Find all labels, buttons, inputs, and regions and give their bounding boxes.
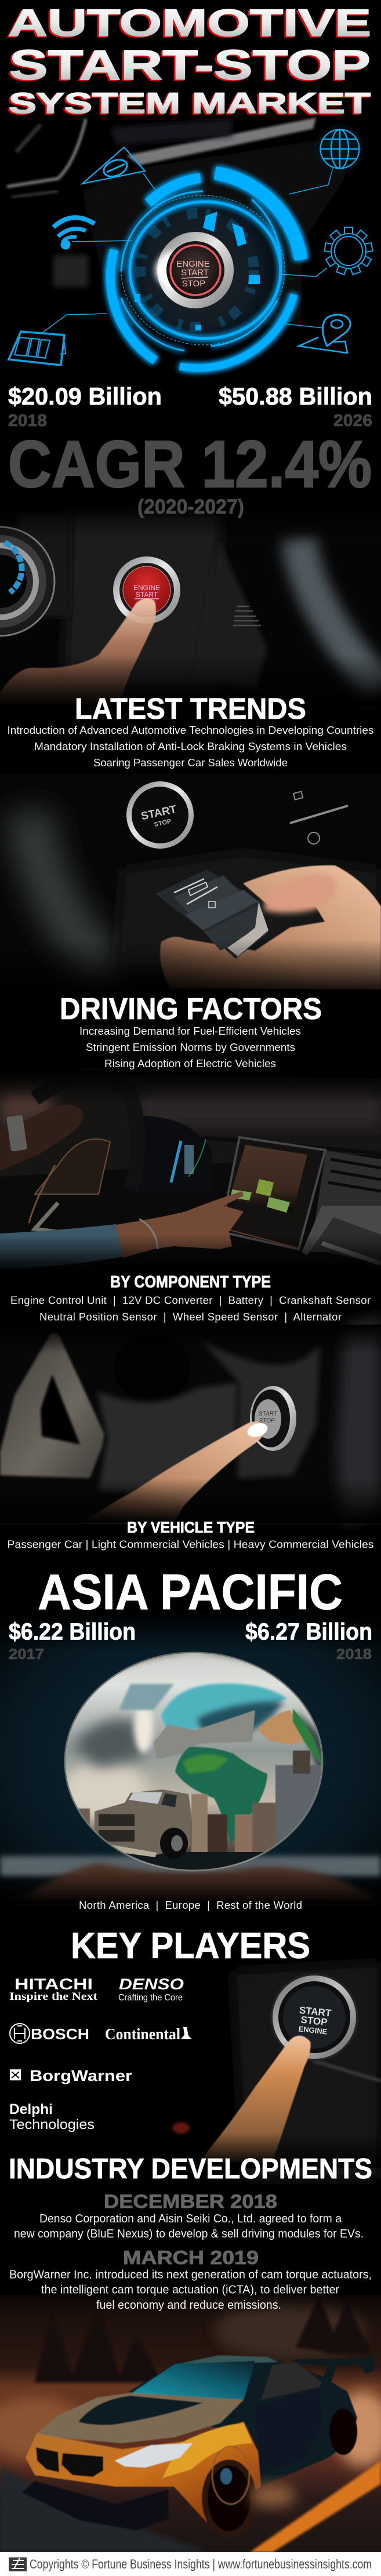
orange dust left bbox=[0, 2397, 87, 2461]
fade cockpit image top bbox=[0, 1069, 381, 1104]
africa green bbox=[293, 1709, 322, 1765]
icon: triangle warning bbox=[82, 147, 145, 184]
panel: company logos bbox=[9, 1975, 192, 2133]
red indicator light bbox=[172, 2122, 190, 2134]
hand holding key bbox=[160, 865, 381, 989]
fade key image bottom bbox=[0, 939, 381, 997]
trend 1: Introduction of Advanced Automotive Technologies in Developing Countries bbox=[7, 724, 373, 736]
panel: latest trends bbox=[7, 692, 373, 769]
factor 2: Stringent Emission Norms by Governments bbox=[86, 1041, 295, 1053]
development 2: BorgWarner Inc. introduced its next generation of cam torque actuators, bbox=[9, 2269, 372, 2282]
south america highlight bbox=[183, 1754, 229, 1774]
vent bbox=[233, 606, 261, 625]
panel: driving factors bbox=[60, 992, 322, 1069]
start stop engine button bbox=[270, 1973, 358, 2061]
dark column bbox=[114, 1332, 190, 1404]
grille right bbox=[61, 2453, 103, 2477]
panel: key fob image bbox=[0, 774, 381, 997]
start button: STOP bbox=[182, 279, 205, 289]
fade finger image top bbox=[0, 1325, 381, 1354]
dashboard leather panel bbox=[64, 510, 220, 690]
glass globe bbox=[61, 1652, 325, 1875]
orange nose bbox=[26, 2422, 261, 2522]
road stripe bbox=[250, 2461, 381, 2552]
heading: key players: KEY PLAYERS bbox=[71, 1926, 310, 1966]
distant hill glow bbox=[215, 2301, 365, 2359]
forecast period: (2020-2027) bbox=[137, 496, 244, 518]
instrument cluster bbox=[125, 1116, 212, 1194]
panel: cockpit image bbox=[0, 1072, 381, 1271]
development 2: the intelligent cam torque actuation (iCTA), to deliver better bbox=[41, 2284, 339, 2297]
panel: march 2019 development bbox=[9, 2247, 372, 2312]
thumb highlight bbox=[264, 874, 336, 913]
logo: Hitachi: Inspire the Next bbox=[9, 1991, 98, 2003]
logo: Delphi: Technologies bbox=[9, 2117, 95, 2133]
panel: footer bbox=[0, 2552, 381, 2576]
date march 2019: MARCH 2019 bbox=[123, 2247, 259, 2268]
wrist bracelet bbox=[139, 1219, 158, 1249]
title bbox=[8, 1, 371, 119]
yellow highlight bbox=[162, 2423, 252, 2478]
dark sea bbox=[197, 1701, 284, 1733]
start stop engine button: STOP bbox=[300, 2014, 328, 2028]
fade bottom bbox=[0, 1872, 381, 1904]
headlight bbox=[115, 2443, 193, 2468]
dashboard panel bbox=[116, 852, 381, 985]
car body bbox=[22, 2355, 357, 2534]
year 2018: 2018 bbox=[8, 412, 47, 430]
panel: button image behind key players bbox=[172, 1962, 381, 2180]
fade over button image top bbox=[0, 499, 381, 539]
panel icons bbox=[290, 791, 348, 844]
hand touching screen bbox=[116, 1191, 244, 1258]
icon: wifi bbox=[53, 217, 95, 249]
panel: by component type bbox=[10, 1273, 371, 1323]
icon: gear bbox=[324, 227, 373, 275]
forest silhouettes bbox=[35, 2295, 371, 2382]
logo: Bosch: BOSCH bbox=[31, 2025, 89, 2043]
key fob bbox=[155, 869, 268, 959]
title line 2: START-STOP bbox=[9, 42, 371, 89]
trend 2: Mandatory Installation of Anti-Lock Braking Systems in Vehicles bbox=[34, 740, 347, 752]
left panel bbox=[17, 513, 70, 617]
finger pressing button bbox=[0, 599, 156, 704]
logo: BorgWarner: BorgWarner bbox=[30, 2067, 133, 2084]
bottom fade bbox=[174, 2133, 381, 2168]
start stop engine button: START bbox=[299, 2004, 332, 2019]
leather panel right bbox=[200, 1339, 320, 1478]
red engine start button: START bbox=[136, 591, 158, 599]
dashboard backdrop bbox=[0, 1072, 381, 1269]
steering wheel bbox=[29, 1076, 138, 1235]
fade top bbox=[0, 1611, 381, 1652]
start stop button bbox=[126, 781, 194, 849]
dark upper rim bbox=[115, 1653, 261, 1676]
lower intake bbox=[22, 2481, 168, 2530]
vehicle list: Passenger Car | Light Commercial Vehicles | Heavy Commercial Vehicles bbox=[7, 1538, 373, 1550]
logo: Denso bbox=[118, 1975, 184, 2003]
value 2017: $6.22 Billion bbox=[9, 1618, 136, 1645]
north america silver bbox=[154, 1710, 255, 1759]
development 2 bbox=[9, 2269, 372, 2312]
background scene bbox=[0, 2295, 381, 2552]
logo: Delphi bbox=[9, 2101, 95, 2133]
value 2018: $6.27 Billion bbox=[245, 1618, 372, 1645]
icon: battery bbox=[9, 332, 66, 365]
date december 2018: DECEMBER 2018 bbox=[104, 2191, 277, 2212]
panel: sports car image bbox=[0, 2295, 381, 2552]
wing bbox=[293, 2353, 374, 2384]
logo: Hitachi: HITACHI bbox=[14, 1975, 93, 1993]
blurred steering wheel bbox=[29, 812, 110, 974]
start stop engine button: ENGINE bbox=[298, 2024, 328, 2036]
panel: industry developments bbox=[9, 2153, 372, 2240]
title line 3: SYSTEM MARKET bbox=[9, 87, 371, 119]
dashed inner ring bbox=[121, 195, 285, 345]
spoke opening bbox=[41, 1374, 80, 1445]
pointing finger bbox=[81, 1421, 266, 1523]
hood scoop bbox=[78, 2396, 203, 2425]
mist band bbox=[0, 1856, 381, 1876]
ocean teal bbox=[161, 1683, 287, 1733]
fade finger image bottom bbox=[0, 1478, 381, 1523]
logo: Denso: Crafting the Core bbox=[118, 1993, 183, 2003]
development 2: fuel economy and reduce emissions. bbox=[96, 2299, 281, 2312]
dirt mound bbox=[0, 1864, 381, 1901]
value 2018: $20.09 Billion bbox=[8, 383, 162, 410]
start button bbox=[155, 232, 234, 308]
grille left bbox=[36, 2447, 59, 2472]
ground inside globe bbox=[125, 1852, 264, 1870]
leather panel bbox=[232, 1962, 381, 2180]
side windows bbox=[261, 2362, 322, 2400]
triangular trim bbox=[194, 540, 267, 690]
fade over button image bottom bbox=[0, 655, 381, 707]
south america bbox=[175, 1747, 267, 1844]
start stop button: STOP bbox=[259, 1418, 275, 1424]
base bbox=[0, 1327, 381, 1525]
fade car image top bbox=[0, 2266, 381, 2319]
panel: market size image backdrop bbox=[0, 510, 381, 707]
glowing blue rings bbox=[110, 173, 301, 368]
icon: Fortune Business Insights logo bbox=[9, 2557, 27, 2571]
start stop button: START bbox=[259, 1411, 278, 1417]
start button: START bbox=[181, 268, 209, 278]
component list 2: Neutral Position Sensor | Wheel Speed Sensor | Alternator bbox=[39, 1311, 342, 1323]
city skyline bbox=[78, 1750, 321, 1852]
door panel bbox=[255, 2388, 322, 2475]
by component black band bbox=[0, 1269, 381, 1327]
year 2017: 2017 bbox=[9, 1646, 44, 1662]
panel: by vehicle type bbox=[7, 1519, 373, 1550]
wheel dust bbox=[249, 2484, 296, 2507]
connector lines bbox=[42, 168, 333, 333]
start stop button: STOP bbox=[154, 818, 172, 828]
logo: Hitachi bbox=[9, 1975, 98, 2003]
steering spoke bbox=[0, 1333, 104, 1478]
dashboard backdrop bbox=[7, 118, 348, 325]
panel: finger on start button image bbox=[0, 1316, 381, 1525]
fade cockpit image bottom bbox=[0, 1235, 381, 1272]
development 1: new company (BluE Nexus) to develop & sell driving modules for EVs. bbox=[14, 2228, 364, 2240]
globe rim bbox=[65, 1653, 322, 1871]
panel: hero illustration bbox=[7, 118, 373, 368]
rear wheel bbox=[329, 2408, 357, 2455]
other regions: North America | Europe | Rest of the World bbox=[79, 1899, 302, 1911]
africa bbox=[257, 1710, 306, 1745]
roof bbox=[174, 2355, 278, 2365]
factor 1: Increasing Demand for Fuel-Efficient Vehicles bbox=[79, 1025, 301, 1037]
right door trim bbox=[336, 1316, 381, 1525]
panel: asia pacific bbox=[9, 1564, 372, 1911]
windshield bbox=[129, 2361, 255, 2400]
value 2026: $50.88 Billion bbox=[219, 383, 372, 410]
instrument knob bbox=[0, 527, 55, 636]
blurred steering wheel bbox=[299, 539, 381, 690]
logo: Denso: DENSO bbox=[119, 1975, 184, 1993]
central textured hub bbox=[128, 198, 273, 343]
trend 3: Soaring Passenger Car Sales Worldwide bbox=[93, 756, 288, 769]
start stop button bbox=[250, 1386, 296, 1451]
logo: Delphi: Delphi bbox=[9, 2101, 53, 2117]
painted nail bbox=[245, 1421, 270, 1439]
pickup truck bbox=[95, 1789, 192, 1859]
road bbox=[0, 2466, 209, 2552]
heading: BY VEHICLE TYPE bbox=[127, 1519, 255, 1536]
pointing finger bbox=[199, 2036, 311, 2162]
driver hand and watch bbox=[0, 1105, 84, 1171]
blue sleeve bbox=[0, 1224, 124, 1271]
development 1: Denso Corporation and Aisin Seiki Co., Ltd. agreed to form a bbox=[39, 2213, 342, 2225]
right rim shadow bbox=[295, 1709, 322, 1767]
logo: Bosch bbox=[10, 2024, 89, 2043]
dash right trim bbox=[302, 1151, 381, 1264]
start button: ENGINE bbox=[176, 259, 210, 269]
icon: globe bbox=[319, 128, 361, 170]
heading: BY COMPONENT TYPE bbox=[110, 1273, 271, 1291]
start stop button: START bbox=[140, 803, 178, 823]
dust right bbox=[333, 2391, 381, 2466]
component list 1: Engine Control Unit | 12V DC Converter | Battery | Crankshaft Sensor bbox=[10, 1294, 371, 1307]
title line 1: AUTOMOTIVE bbox=[8, 1, 371, 44]
hood bbox=[37, 2393, 244, 2443]
development 1 bbox=[14, 2213, 364, 2240]
heading: ASIA PACIFIC bbox=[38, 1564, 343, 1620]
icon: map pin bbox=[299, 315, 350, 353]
factor 3: Rising Adoption of Electric Vehicles bbox=[104, 1057, 276, 1069]
year 2018: 2018 bbox=[336, 1646, 372, 1662]
red engine start button: ENGINE bbox=[133, 584, 160, 592]
year 2026: 2026 bbox=[333, 412, 372, 430]
night background bbox=[0, 1611, 381, 1901]
heading: LATEST TRENDS bbox=[75, 692, 306, 725]
touch screen bbox=[220, 1137, 325, 1249]
panel: globe image bbox=[0, 1611, 381, 1904]
panel: market size figures bbox=[8, 383, 372, 518]
front wheel bbox=[205, 2462, 253, 2534]
segmented gauge ring bbox=[135, 212, 260, 330]
leather panel centre bbox=[97, 1382, 238, 1493]
clouds left bbox=[61, 1762, 148, 1820]
heading: DRIVING FACTORS bbox=[60, 992, 322, 1026]
logo: Continental: Continental bbox=[105, 2025, 180, 2043]
red engine start button bbox=[113, 556, 180, 624]
rear body dark bbox=[129, 2355, 357, 2488]
